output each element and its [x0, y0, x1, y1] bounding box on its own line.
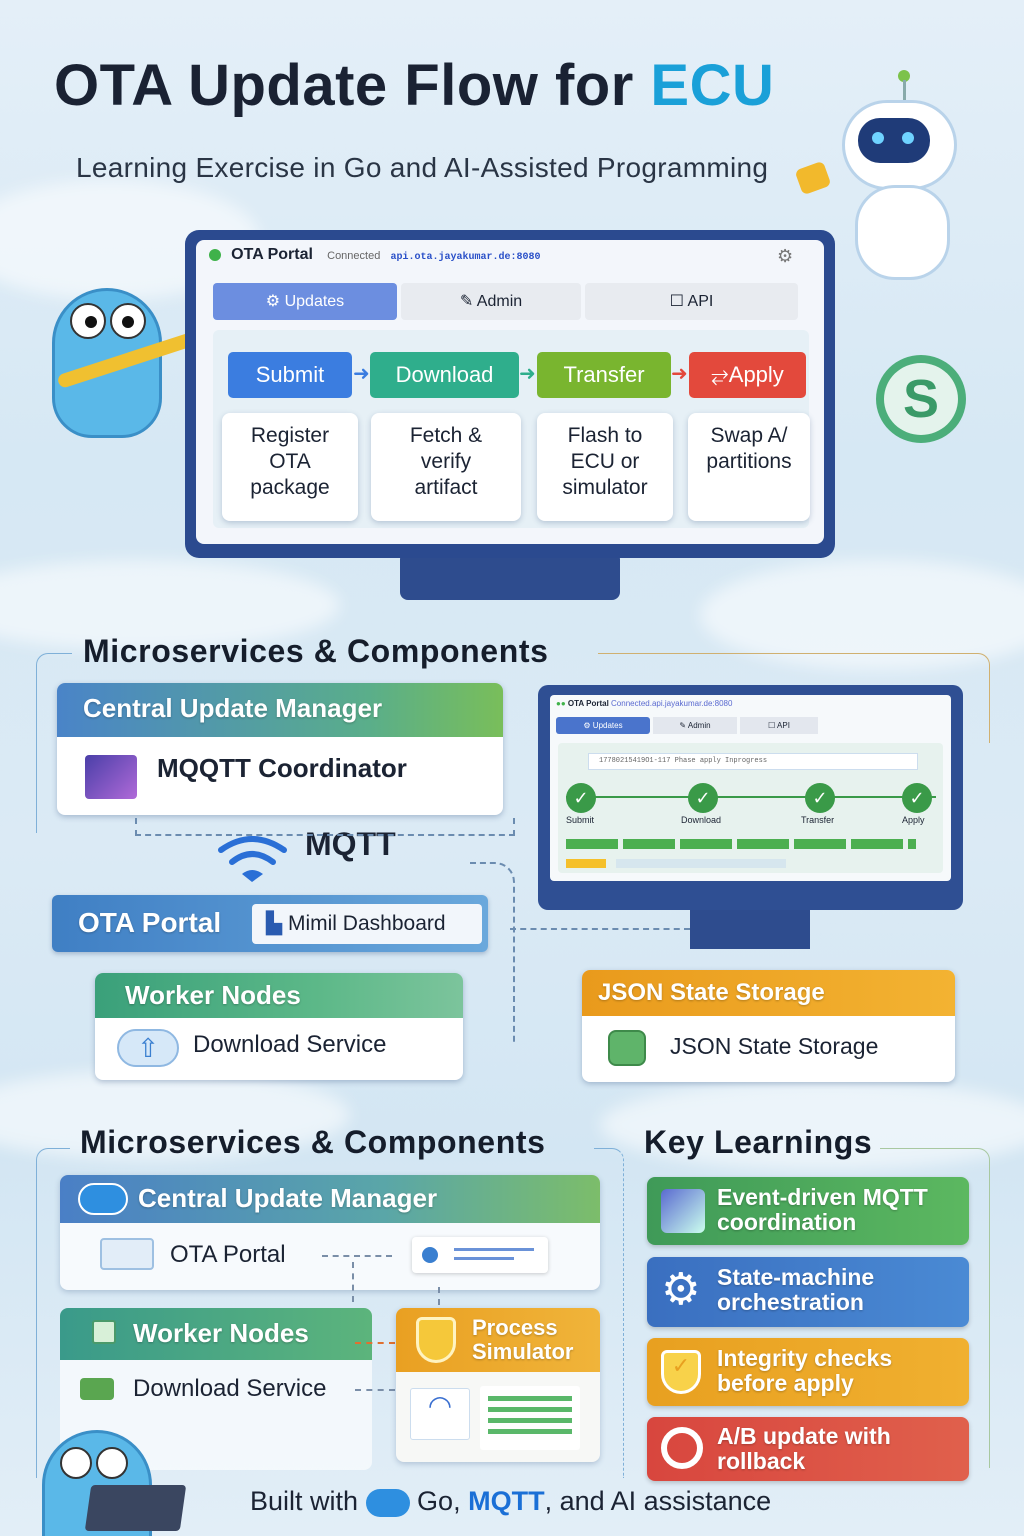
learning: state machine [647, 1257, 969, 1327]
bracket lines section 2 [36, 1148, 70, 1478]
panel: dashboard monitor 2: ✓ [573, 788, 589, 808]
panel: worker nodes 2: Download Service [133, 1375, 326, 1402]
panel: worker nodes 2 [60, 1308, 372, 1470]
icon: gopher bottom [42, 1430, 186, 1536]
panel: OTA portal monitor [185, 230, 835, 600]
tabs: ⚙ Updates [266, 293, 344, 310]
section heading: key learnings: Key Learnings [644, 1124, 872, 1160]
panel: process simulator [396, 1308, 600, 1462]
panel: dashboard monitor 2: ☐ API [768, 721, 790, 730]
step cards: OTA [269, 450, 311, 473]
panel: dashboard monitor 2: ✎ Admin [679, 721, 711, 730]
panel: OTA portal bar: OTA Portal [78, 907, 221, 938]
panel: central update manager 1: Central Update Manager [83, 693, 382, 723]
header bar [209, 246, 793, 266]
panel: OTA portal monitor: Transfer [563, 362, 645, 387]
panel: OTA portal monitor: Swap A/ [710, 424, 788, 447]
panel: OTA portal monitor: ☐ API [670, 293, 713, 310]
panel: dashboard monitor 2: 17780215419O1-117 Phase apply Inprogress [599, 757, 767, 765]
header bar: OTA Portal Connected api.ota.jayakumar.de:8080 [231, 246, 541, 263]
panel: OTA portal monitor: ✎ Admin [460, 293, 522, 310]
panel: dashboard monitor 2: ✓ [695, 788, 711, 808]
bracket lines section 1 [36, 653, 72, 833]
panel: worker nodes 1 [95, 973, 463, 1080]
label: MQTT: MQTT [305, 826, 396, 862]
section heading: microservices 2: Microservices & Components [80, 1124, 546, 1160]
panel: dashboard monitor 2: Apply [902, 815, 925, 825]
panel: OTA portal monitor: ⥂Apply [711, 362, 784, 387]
panel: OTA portal monitor: ➜ [519, 363, 536, 385]
step buttons [228, 352, 352, 398]
step cards [222, 413, 358, 521]
subtitle: Learning Exercise in Go and AI-Assisted Programming [76, 152, 768, 183]
panel: OTA portal monitor: Fetch & [410, 424, 482, 447]
icon: mqtt signal [85, 755, 137, 799]
icon: robot mascot [796, 70, 957, 280]
panel: central update manager 2: Central Update Manager [138, 1183, 437, 1213]
chip: dashboard [252, 904, 482, 944]
step cards: package [250, 476, 330, 499]
icon: portal doc [100, 1238, 154, 1270]
panel: process simulator: ◠ [428, 1390, 452, 1421]
panel: dashboard monitor 2: Download [681, 815, 721, 825]
panel: central update manager 1: MQQTT Coordinator [157, 753, 407, 783]
learning: state machine: orchestration [717, 1289, 864, 1315]
panel: central update manager 2 [60, 1175, 600, 1290]
learning: event-driven: coordination [717, 1209, 856, 1235]
panel: OTA portal monitor: Download [396, 362, 493, 387]
panel: worker nodes 1: Download Service [193, 1031, 386, 1058]
panel: central update manager 2: OTA Portal [170, 1241, 286, 1268]
panel: worker nodes 1: Worker Nodes [125, 980, 301, 1010]
panel: OTA portal monitor: Flash to [568, 424, 642, 447]
icon: shield [416, 1317, 456, 1363]
panel: OTA portal monitor: simulator [562, 476, 648, 499]
tabs [213, 283, 397, 320]
panel: dashboard monitor 2: Transfer [801, 815, 834, 825]
panel: OTA portal bar [52, 895, 488, 952]
icon: green S badge: S [903, 369, 939, 429]
footer: Built with Go, MQTT, and AI assistance [250, 1486, 771, 1516]
learning: A/B rollback: rollback [717, 1448, 805, 1474]
learning: event-driven [647, 1177, 969, 1245]
panel: OTA portal monitor: partitions [706, 450, 792, 473]
panel: JSON state storage: JSON State Storage [598, 979, 825, 1006]
icon: floppy [92, 1320, 116, 1344]
bracket line key learnings [880, 1148, 990, 1468]
panel: worker nodes 2: Worker Nodes [133, 1318, 309, 1348]
icon: gopher face [78, 1183, 128, 1215]
panel: key learnings list [645, 1177, 971, 1485]
learning: integrity: before apply [717, 1370, 854, 1396]
icon: download service [80, 1378, 114, 1400]
panel: process simulator: Simulator [472, 1339, 573, 1364]
header bar: ⚙ [777, 246, 793, 266]
panel: process simulator: Process [472, 1315, 558, 1340]
panel: JSON state storage: JSON State Storage [670, 1033, 878, 1059]
icon: gopher mascot top [52, 288, 185, 438]
panel: OTA portal monitor: ➜ [671, 363, 688, 385]
title: OTA Update Flow for ECU [54, 53, 774, 118]
panel: central update manager 1 [57, 683, 503, 815]
step cards: Register [251, 424, 329, 447]
learning: event-driven: Event-driven MQTT [717, 1184, 928, 1210]
panel: dashboard monitor 2: ✓ [909, 788, 925, 808]
section heading: microservices 1: Microservices & Components [83, 633, 549, 669]
panel: OTA portal monitor: verify [421, 450, 471, 473]
icon: upload cloud: ⇧ [137, 1033, 159, 1063]
panel: OTA portal monitor: artifact [414, 476, 478, 499]
step buttons: Submit [256, 362, 324, 387]
panel: OTA portal monitor: ECU or [571, 450, 639, 473]
icon: upload cloud [117, 1029, 179, 1067]
learning: integrity: Integrity checks [717, 1345, 892, 1371]
learning: integrity [647, 1338, 969, 1406]
icon: green S badge [876, 355, 966, 443]
icon: database [608, 1030, 646, 1066]
learning: A/B rollback: A/B update with [717, 1423, 891, 1449]
panel: dashboard monitor 2 [538, 685, 963, 949]
learning: state machine: ⚙ [661, 1265, 700, 1314]
icon: wifi MQTT [218, 836, 287, 882]
panel: JSON state storage [582, 970, 955, 1082]
chip: dashboard: ▙ Mimil Dashboard [266, 912, 446, 935]
panel: OTA portal monitor: ➜ [353, 363, 370, 385]
learning: integrity: ✓ [672, 1353, 690, 1378]
panel: dashboard monitor 2: ●● OTA Portal Connected.api.jayakumar.de:8080 [556, 699, 732, 708]
panel: dashboard monitor 2: ✓ [812, 788, 828, 808]
panel: dashboard monitor 2: Submit [566, 815, 594, 825]
panel: dashboard monitor 2: ⚙ Updates [583, 721, 623, 730]
learning: A/B rollback [647, 1417, 969, 1481]
learning: state machine: State-machine [717, 1264, 874, 1290]
